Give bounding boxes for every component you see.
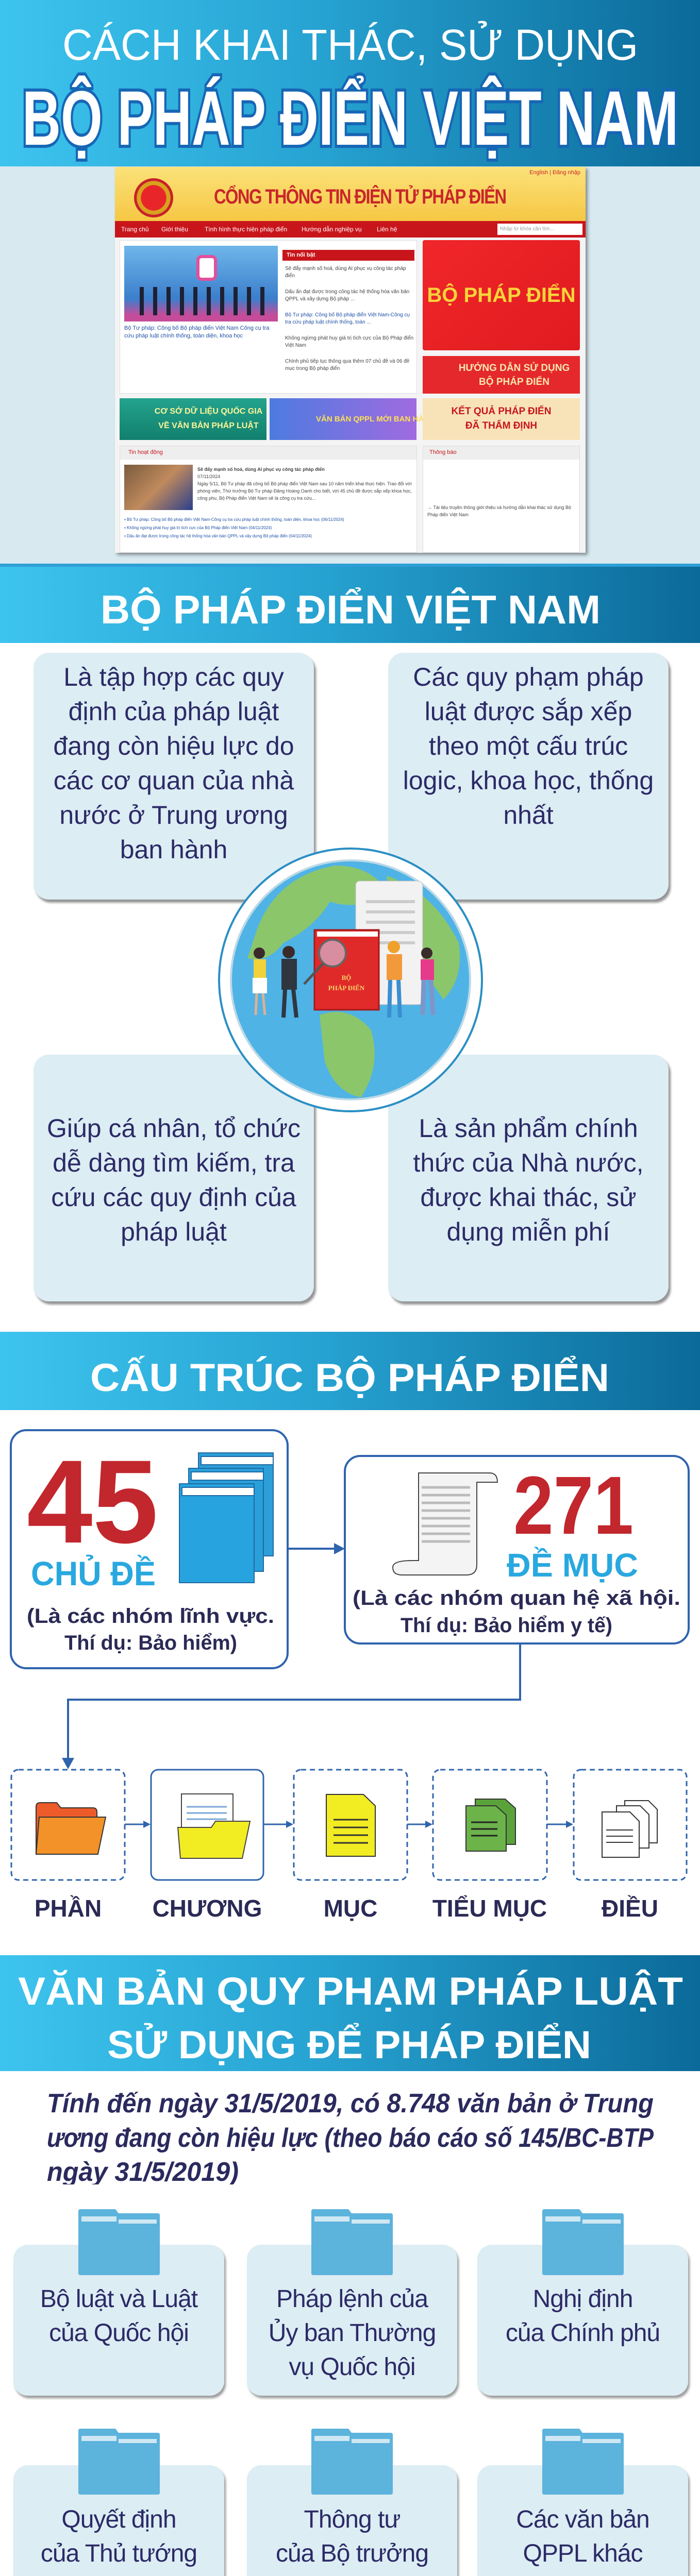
level box: chương: CHƯƠNG: [153, 1895, 262, 1922]
notice panel: Thông báo: [429, 449, 457, 455]
main news panel: [120, 240, 417, 394]
folder card: Bộ luật: Bộ luật và Luật: [40, 2285, 197, 2313]
card: definition: nước ở Trung ương: [59, 801, 288, 829]
activity news panel: [120, 446, 417, 553]
activity news panel: ▪ Dấu ấn đạt được trong công tác hệ thống hóa văn bản QPPL và xây dựng Bộ pháp điển (04/11/2024): [124, 534, 312, 538]
box: 45 chủ đề: CHỦ ĐỀ: [31, 1554, 156, 1592]
news photo: [124, 246, 278, 321]
nav bar: Nhập từ khóa cần tìm...: [500, 226, 554, 232]
beige banner: [423, 398, 580, 440]
folder card: Pháp lệnh: vụ Quốc hội: [289, 2353, 415, 2381]
box: 271 đề mục: [345, 1456, 689, 1643]
main news panel: Dấu ấn đạt được trong công tác hệ thống hóa văn bản QPPL và xây dựng Bộ pháp ...: [285, 289, 409, 302]
title line 1: CÁCH KHAI THÁC, SỬ DỤNG: [62, 21, 638, 69]
level box: mục: [294, 1770, 407, 1922]
box: 45 chủ đề: 45: [27, 1435, 158, 1568]
globe illustration: PHÁP ĐIỂN: [328, 984, 365, 992]
green banner: CƠ SỞ DỮ LIỆU QUỐC GIA: [155, 407, 262, 416]
box: 271 đề mục: Thí dụ: Bảo hiểm y tế): [401, 1614, 612, 1637]
intro text: statistics: [47, 2089, 654, 2184]
level box: điều: ĐIỀU: [602, 1895, 658, 1922]
connector arrow: [62, 1643, 520, 1769]
screenshot background: [0, 166, 700, 564]
level box: điều: [574, 1770, 687, 1922]
emblem: [134, 178, 173, 217]
box: 271 đề mục: 271: [513, 1459, 634, 1551]
nav bar: Giới thiệu: [161, 226, 188, 233]
structure diagram: [10, 1429, 690, 1922]
card: definition: Là tập hợp các quy: [63, 663, 284, 691]
green banner: VỀ VĂN BẢN PHÁP LUẬT: [158, 421, 259, 430]
folder card: Thông tư: của Bộ trưởng: [276, 2540, 428, 2567]
red banner: Bộ pháp điển: BỘ PHÁP ĐIỂN: [427, 284, 576, 307]
folder icons: [78, 2209, 624, 2495]
level box: chương: [151, 1770, 263, 1922]
folder card: Thông tư: [247, 2465, 457, 2576]
section header: Văn bản QPPL: [0, 1955, 700, 2071]
beige banner: ĐÃ THẨM ĐỊNH: [465, 420, 537, 431]
nav bar: Tình hình thực hiện pháp điển: [205, 226, 287, 233]
nav bar: [115, 221, 586, 238]
beige banner: KẾT QUẢ PHÁP ĐIỂN: [452, 406, 551, 417]
arrow: to đề mục: [288, 1543, 345, 1554]
folder card: Thông tư: Thông tư: [304, 2506, 400, 2533]
notice panel: → Tài liệu truyền thông giới thiệu và hướng dẫn khai thác sử dụng Bộ Pháp điển Việt Nam: [427, 505, 571, 517]
card: official product: được khai thác, sử: [420, 1183, 637, 1212]
folder card: Các văn bản khác: Các văn bản: [516, 2506, 649, 2533]
activity news panel: 07/11/2024: [197, 474, 220, 479]
box: 45 chủ đề: [11, 1430, 288, 1668]
folder card: Bộ luật: của Quốc hội: [49, 2319, 189, 2347]
red banner: Bộ pháp điển: [423, 240, 580, 350]
header: title band: [0, 0, 700, 166]
card: official product: thức của Nhà nước,: [413, 1148, 644, 1177]
card: purpose: Giúp cá nhân, tổ chức: [47, 1114, 301, 1143]
main news panel: Bộ Tư pháp: Công bố Bộ pháp điển Việt Nam-Công cụ tra cứu pháp luật chính thống, toàn ...: [285, 312, 410, 325]
main news panel: Không ngừng phát huy giá trị tích cực của Bộ Pháp điển Việt Nam: [285, 335, 413, 348]
folder card: Quyết định: [13, 2465, 224, 2576]
card: definition: [34, 653, 314, 900]
level box: phần: [11, 1770, 125, 1922]
card: structure: Các quy phạm pháp: [413, 663, 644, 691]
activity news panel: ▪ Bộ Tư pháp: Công bố Bộ pháp điển Việt Nam-Công cụ tra cứu pháp luật chính thống, toàn diện, khoa học (06/11/2024): [124, 517, 344, 522]
section header: Bộ pháp điển Việt Nam: BỘ PHÁP ĐIỂN VIỆT NAM: [101, 587, 601, 632]
card: purpose: cứu các quy định của: [51, 1183, 296, 1212]
card: structure: logic, khoa học, thống: [403, 766, 654, 795]
section header: Văn bản QPPL: VĂN BẢN QUY PHẠM PHÁP LUẬT: [18, 1969, 683, 2013]
card: purpose: dễ dàng tìm kiếm, tra: [53, 1148, 295, 1177]
folder card: Nghị định: của Chính phủ: [506, 2319, 660, 2347]
site header: [115, 167, 586, 221]
card: official product: [388, 1055, 669, 1301]
section header: Văn bản QPPL: SỬ DỤNG ĐỂ PHÁP ĐIỂN: [107, 2023, 591, 2067]
section header: Cấu trúc bộ pháp điển: CẤU TRÚC BỘ PHÁP ĐIỂN: [90, 1355, 609, 1400]
globe illustration: [218, 848, 483, 1112]
site header: English | Đăng nhập: [529, 170, 580, 176]
box: 271 đề mục: ĐỀ MỤC: [507, 1547, 638, 1584]
folder card: Quyết định: Quyết định: [61, 2506, 176, 2533]
globe illustration: BỘ: [342, 974, 351, 981]
section header: Bộ pháp điển Việt Nam: [0, 567, 700, 643]
nav bar: Liên hệ: [377, 226, 397, 233]
activity news panel: ▪ Không ngừng phát huy giá trị tích cực của Bộ Pháp điển Việt Nam (04/11/2024): [124, 526, 272, 530]
notice panel: [423, 446, 580, 553]
box: 45 chủ đề: (Là các nhóm lĩnh vực.: [27, 1605, 274, 1628]
hot news list: [282, 250, 414, 261]
card: definition: đang còn hiệu lực do: [53, 732, 294, 760]
card: official product: dụng miễn phí: [447, 1217, 610, 1246]
folder card: Pháp lệnh: Ủy ban Thường: [269, 2319, 436, 2347]
main news panel: Bộ Tư pháp: Công bố Bộ pháp điển Việt Nam Công cụ tra cứu pháp luật chính thống, toàn diện, khoa học: [124, 325, 270, 339]
green banner: [120, 398, 266, 440]
card: purpose: pháp luật: [121, 1217, 227, 1246]
main news panel: Chính phủ tiếp tục thông qua thêm 07 chủ đề và 06 đề mục trong Bộ pháp điển: [285, 359, 409, 371]
card: purpose: [34, 1055, 314, 1301]
screenshot: website home page: [115, 167, 586, 553]
card: definition: định của pháp luật: [69, 697, 279, 726]
folder card: Nghị định: Nghị định: [533, 2285, 632, 2313]
main news panel: Sẽ đẩy mạnh số hoá, dùng AI phục vụ công tác pháp điển: [285, 266, 406, 279]
folder card: Nghị định: [477, 2245, 688, 2396]
level box: tiểu mục: [432, 1770, 547, 1922]
activity news panel: Ngày 5/11, Bộ Tư pháp đã công bố Bộ pháp điển Việt Nam sau 10 năm triển khai thực hiện. Trao đổi với phóng viên, Thứ trưởng Bộ Tư pháp Đặng Hoàng Oanh cho biết, với 45 chủ đề được sắp xếp khoa học, công phu, Bộ Pháp điển Việt Nam sẽ là công cụ tra cứu...: [197, 481, 412, 501]
box: 271 đề mục: (Là các nhóm quan hệ xã hội.: [353, 1587, 680, 1609]
intro text: statistics: Tính đến ngày 31/5/2019, có 8.748 văn bản ở Trung: [47, 2089, 654, 2119]
card: definition: ban hành: [120, 835, 227, 864]
folder card: Quyết định: của Thủ tướng: [41, 2540, 197, 2567]
folder card: Các văn bản khác: QPPL khác: [523, 2540, 642, 2567]
red banner: guide: BỘ PHÁP ĐIỂN: [479, 377, 549, 387]
purple banner: [270, 398, 416, 440]
folder card: Các văn bản khác: [477, 2465, 688, 2576]
hot news list: Tin nổi bật: [287, 252, 315, 258]
level box: mục: MỤC: [324, 1895, 377, 1922]
card: structure: theo một cấu trúc: [429, 732, 628, 760]
card: official product: Là sản phẩm chính: [419, 1114, 638, 1143]
activity news panel: Tin hoạt động: [128, 449, 163, 455]
card: structure: [388, 653, 669, 900]
site title: CỔNG THÔNG TIN ĐIỆN TỬ PHÁP ĐIỂN: [214, 185, 506, 208]
nav bar: Trang chủ: [121, 226, 149, 233]
card: structure: luật được sắp xếp: [425, 697, 632, 726]
folder card: Bộ luật: [13, 2245, 224, 2396]
card: definition: các cơ quan của nhà: [54, 766, 294, 795]
box: 45 chủ đề: Thí dụ: Bảo hiểm): [64, 1632, 237, 1654]
activity news panel: Sẽ đẩy mạnh số hoá, dùng AI phục vụ công tác pháp điển: [197, 467, 325, 472]
purple banner: VĂN BẢN QPPL MỚI BAN HÀNH: [316, 415, 435, 423]
section header: Cấu trúc bộ pháp điển: [0, 1332, 700, 1410]
red banner: guide: [423, 356, 580, 394]
nav bar: Hướng dẫn nghiệp vụ: [302, 226, 362, 233]
level box: phần: PHẦN: [35, 1895, 102, 1922]
folder card: Pháp lệnh: [247, 2245, 457, 2396]
red banner: guide: HƯỚNG DẪN SỬ DỤNG: [459, 363, 570, 374]
folder card: Pháp lệnh: Pháp lệnh của: [276, 2285, 428, 2313]
card: structure: nhất: [503, 801, 554, 829]
level box: tiểu mục: TIỂU MỤC: [432, 1895, 547, 1922]
